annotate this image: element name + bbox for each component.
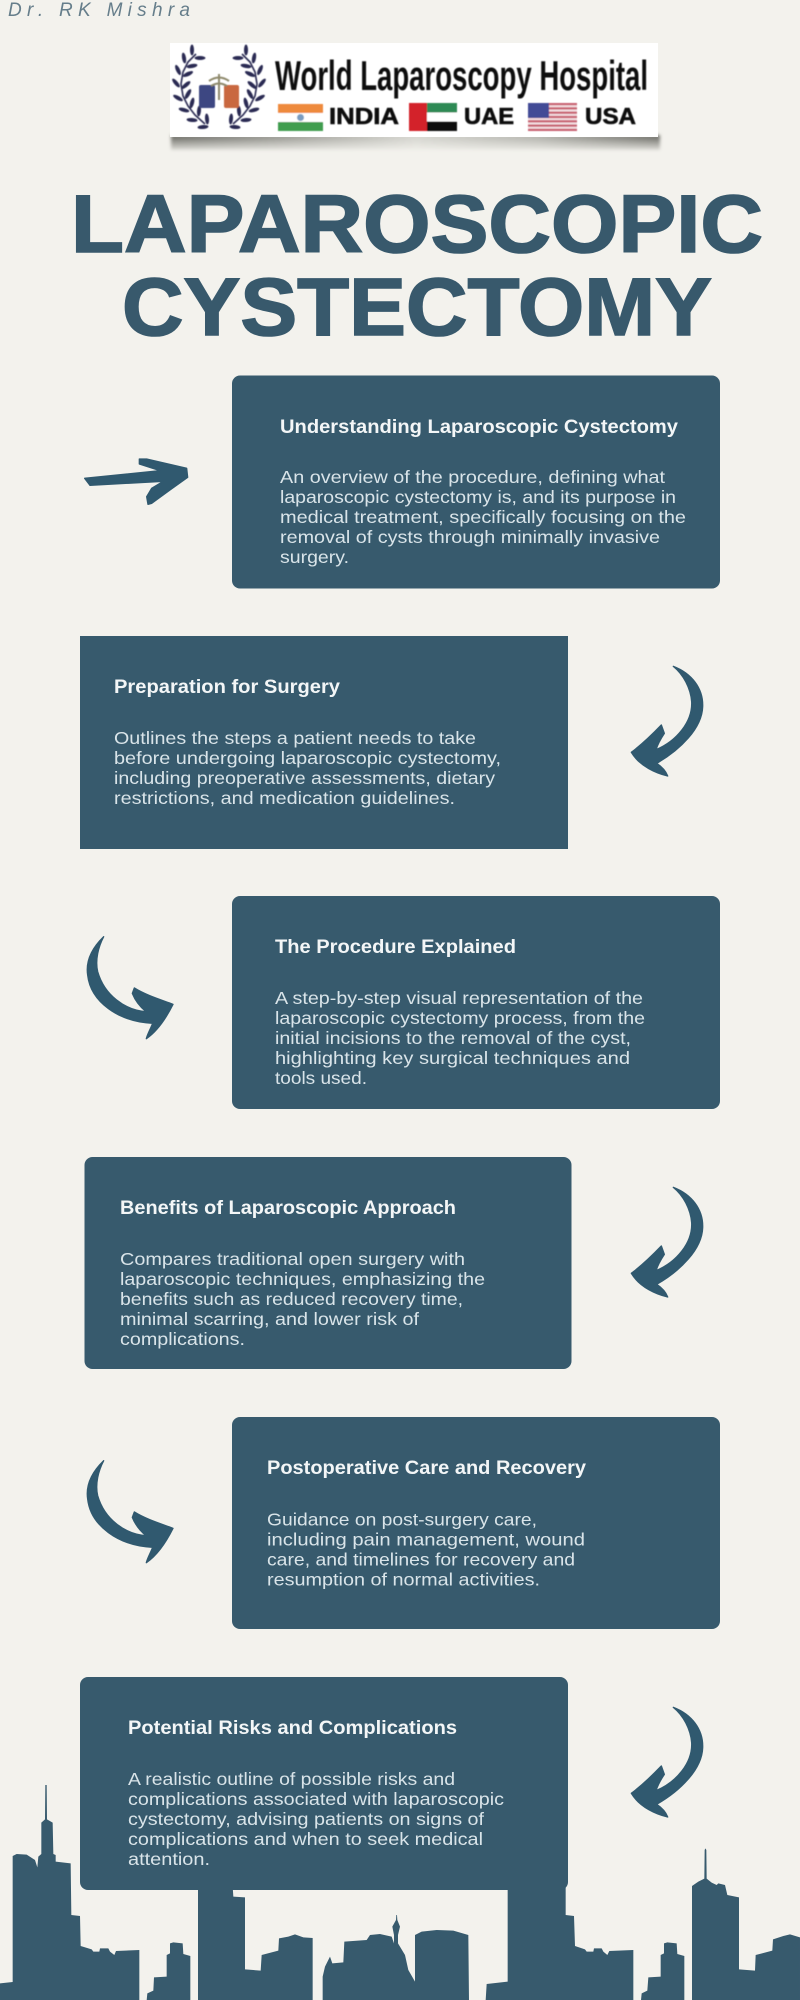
panel: procedure xyxy=(232,896,720,1109)
panel body: minimal scarring, and lower risk of xyxy=(120,1309,419,1329)
arrow: curved down-left xyxy=(631,666,703,776)
arrow: curved down-right xyxy=(87,1461,173,1563)
panel body: surgery. xyxy=(280,547,349,567)
panel body: initial incisions to the removal of the cyst, xyxy=(275,1028,631,1048)
panel body xyxy=(120,1249,485,1349)
flag: USA xyxy=(528,103,577,131)
panel body: including preoperative assessments, dietary xyxy=(114,768,495,788)
panel body xyxy=(114,728,501,808)
panel body: complications and when to seek medical xyxy=(128,1829,483,1849)
arrow: curved down-right xyxy=(87,937,173,1039)
panel heading: Benefits of Laparoscopic Approach xyxy=(120,1198,456,1219)
panel: risks xyxy=(80,1677,568,1890)
panel body: restrictions, and medication guidelines. xyxy=(114,788,455,808)
author credit: Dr. RK Mishra xyxy=(8,0,190,21)
title: LAPAROSCOPIC xyxy=(71,179,763,270)
panel heading: Understanding Laparoscopic Cystectomy xyxy=(280,417,678,438)
arrow: curved down-left xyxy=(631,1187,703,1297)
panel body: A step-by-step visual representation of the xyxy=(275,988,643,1008)
logo white plate xyxy=(170,43,658,137)
flag: UAE xyxy=(409,103,457,131)
panel body: complications associated with laparoscopic xyxy=(128,1789,504,1809)
panel body: laparoscopic cystectomy process, from the xyxy=(275,1008,645,1028)
panel body: attention. xyxy=(128,1849,210,1869)
arrow: straight right xyxy=(85,459,188,504)
panel body: An overview of the procedure, defining what xyxy=(280,467,665,487)
panel body: Outlines the steps a patient needs to take xyxy=(114,728,476,748)
label: USA: USA xyxy=(585,103,636,129)
title: CYSTECTOMY xyxy=(122,262,712,353)
panel body: Compares traditional open surgery with xyxy=(120,1249,465,1269)
panel body: resumption of normal activities. xyxy=(267,1570,540,1590)
panel: understanding xyxy=(232,376,720,588)
panel body: laparoscopic techniques, emphasizing the xyxy=(120,1269,485,1289)
panel body xyxy=(128,1769,504,1869)
panel body: laparoscopic cystectomy is, and its purpose in xyxy=(280,487,676,507)
panel body: highlighting key surgical techniques and xyxy=(275,1048,630,1068)
panel: preparation xyxy=(80,636,568,849)
panel body xyxy=(275,988,645,1088)
panel body: including pain management, wound xyxy=(267,1530,585,1550)
panel heading: Postoperative Care and Recovery xyxy=(267,1458,586,1479)
hospital logo banner xyxy=(170,43,660,151)
panel: postoperative care xyxy=(232,1417,720,1629)
panel: benefits xyxy=(84,1157,572,1369)
label: UAE: UAE xyxy=(464,103,514,129)
panel heading: The Procedure Explained xyxy=(275,937,516,958)
panel body xyxy=(267,1510,585,1590)
panel body: A realistic outline of possible risks and xyxy=(128,1769,455,1789)
panel body: before undergoing laparoscopic cystectomy, xyxy=(114,748,501,768)
panel body xyxy=(280,467,686,567)
panel body: care, and timelines for recovery and xyxy=(267,1550,575,1570)
flag: India xyxy=(278,104,323,131)
panel body: removal of cysts through minimally invasive xyxy=(280,527,660,547)
panel body: complications. xyxy=(120,1329,245,1349)
label: India: INDIA xyxy=(329,103,399,129)
panel body: Guidance on post-surgery care, xyxy=(267,1510,537,1530)
title xyxy=(71,179,763,353)
panel body: medical treatment, specifically focusing on the xyxy=(280,507,686,527)
panel body: benefits such as reduced recovery time, xyxy=(120,1289,463,1309)
panel body: tools used. xyxy=(275,1068,367,1088)
city skyline silhouette xyxy=(0,1785,800,2000)
laurel wreath emblem xyxy=(171,44,267,129)
logo drop shadow xyxy=(171,135,660,151)
arrow: curved down-left xyxy=(631,1707,703,1817)
panel body: cystectomy, advising patients on signs of xyxy=(128,1809,484,1829)
panel heading: Preparation for Surgery xyxy=(114,677,340,698)
panel heading: Potential Risks and Complications xyxy=(128,1718,457,1739)
